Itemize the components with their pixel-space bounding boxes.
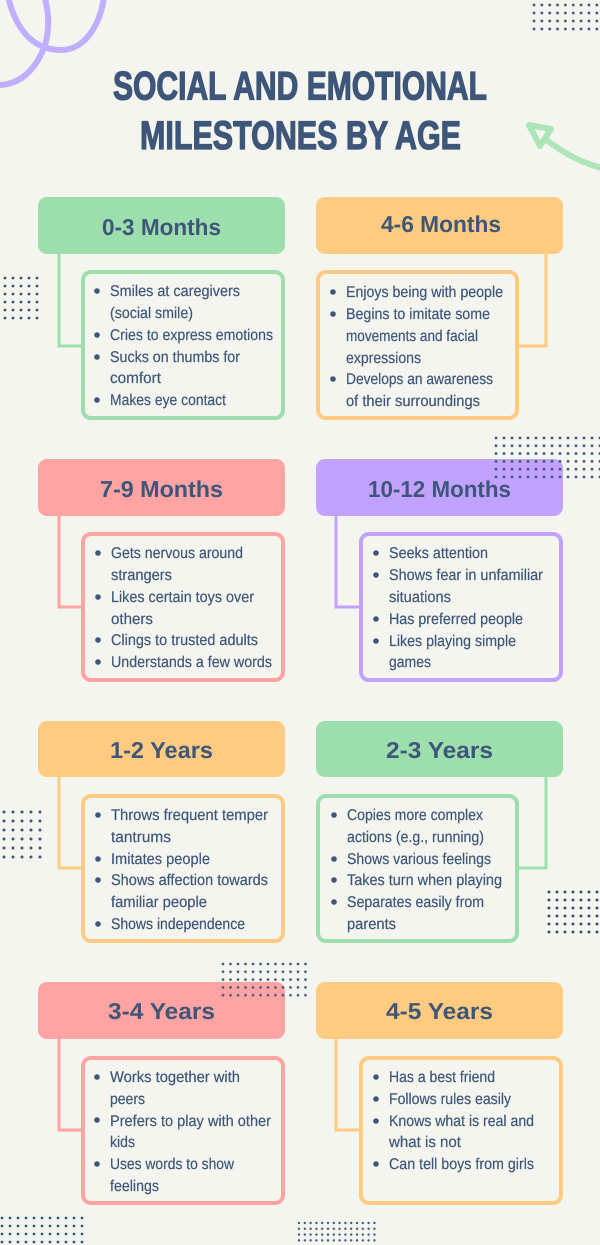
panel: 0-3 Months: Makes eye contact — [110, 392, 227, 409]
panel: 1-2 Years: familiar people — [111, 894, 207, 911]
panel: 3-4 Years: Works together with — [110, 1069, 240, 1086]
title: SOCIAL AND EMOTIONAL — [113, 64, 487, 108]
panel: 4-6 Months: Enjoys being with people — [346, 284, 503, 301]
panel: 10-12 Months: Likes playing simple — [389, 633, 516, 650]
panel: 1-2 Years — [38, 721, 285, 941]
panel: 1-2 Years: Imitates people — [111, 851, 210, 868]
panel: 3-4 Years: Uses words to show — [110, 1156, 235, 1173]
panel: 4-5 Years: Follows rules easily — [389, 1091, 511, 1108]
panel: 1-2 Years: Shows independence — [111, 916, 245, 933]
panel: 7-9 Months: Likes certain toys over — [111, 589, 254, 606]
panel: 2-3 Years: Separates easily from — [347, 894, 484, 911]
panel: 3-4 Years: 3-4 Years — [108, 998, 215, 1024]
panel: 7-9 Months: others — [111, 611, 153, 628]
panel: 4-6 Months: 4-6 Months — [381, 211, 501, 237]
panel: 10-12 Months: Shows fear in unfamiliar — [389, 567, 543, 584]
panel: 0-3 Months — [38, 197, 285, 418]
panel: 4-5 Years: what is not — [388, 1134, 462, 1151]
decorative purple loop — [0, 0, 104, 85]
panel: 2-3 Years: Shows various feelings — [347, 851, 491, 868]
panel: 3-4 Years — [38, 982, 285, 1203]
panel: 3-4 Years: Prefers to play with other — [110, 1113, 271, 1130]
panel: 4-5 Years: Has a best friend — [389, 1069, 495, 1086]
panel: 7-9 Months: 7-9 Months — [100, 476, 223, 502]
icon: green arrow — [529, 125, 600, 168]
panel: 4-6 Months: Develops an awareness — [346, 371, 493, 388]
panel: 10-12 Months: situations — [389, 589, 451, 606]
panel: 2-3 Years: Takes turn when playing — [347, 872, 502, 889]
panel: 0-3 Months: 0-3 Months — [102, 214, 221, 240]
panel: 4-5 Years: 4-5 Years — [386, 998, 493, 1024]
panel: 3-4 Years: feelings — [110, 1178, 159, 1195]
title: MILESTONES BY AGE — [140, 114, 461, 158]
panel: 7-9 Months: Gets nervous around — [111, 545, 243, 562]
panel: 4-6 Months: movements and facial — [346, 328, 478, 345]
panel: 3-4 Years: kids — [110, 1134, 135, 1151]
panel: 4-6 Months: Begins to imitate some — [346, 306, 490, 323]
panel: 7-9 Months: Clings to trusted adults — [111, 632, 258, 649]
panel: 4-6 Months: expressions — [346, 350, 421, 367]
panel: 2-3 Years — [316, 721, 563, 941]
panel: 10-12 Months: games — [389, 654, 431, 671]
panel: 2-3 Years: actions (e.g., running) — [347, 829, 484, 846]
panel: 10-12 Months — [316, 459, 563, 680]
title — [113, 64, 487, 158]
panel: 0-3 Months: Sucks on thumbs for — [110, 349, 240, 366]
panel: 7-9 Months: strangers — [111, 567, 172, 584]
panel: 0-3 Months: Smiles at caregivers — [110, 283, 240, 300]
panel: 4-5 Years: Can tell boys from girls — [389, 1156, 534, 1173]
panel: 10-12 Months: Has preferred people — [389, 611, 523, 628]
panel: 7-9 Months: Understands a few words — [111, 654, 272, 671]
panel: 4-5 Years: Knows what is real and — [389, 1113, 534, 1130]
panel: 10-12 Months: 10-12 Months — [368, 476, 511, 502]
panel: 1-2 Years: Throws frequent temper — [111, 807, 268, 824]
panel: 10-12 Months: Seeks attention — [389, 545, 488, 562]
panel: 0-3 Months: comfort — [110, 370, 162, 387]
panel: 7-9 Months — [38, 459, 285, 680]
panel: 2-3 Years: parents — [347, 916, 396, 933]
panel: 2-3 Years: 2-3 Years — [386, 737, 493, 763]
panel: 2-3 Years: Copies more complex — [347, 807, 483, 824]
panel: 0-3 Months: Cries to express emotions — [110, 327, 273, 344]
panel: 1-2 Years: Shows affection towards — [111, 872, 268, 889]
panel: 0-3 Months: (social smile) — [110, 305, 193, 322]
panel: 4-5 Years — [316, 982, 563, 1203]
panel: 4-6 Months — [316, 197, 563, 418]
panel: 4-6 Months: of their surroundings — [346, 393, 480, 410]
panel: 1-2 Years: tantrums — [111, 829, 171, 846]
panel: 3-4 Years: peers — [110, 1091, 145, 1108]
panel: 1-2 Years: 1-2 Years — [110, 737, 213, 763]
